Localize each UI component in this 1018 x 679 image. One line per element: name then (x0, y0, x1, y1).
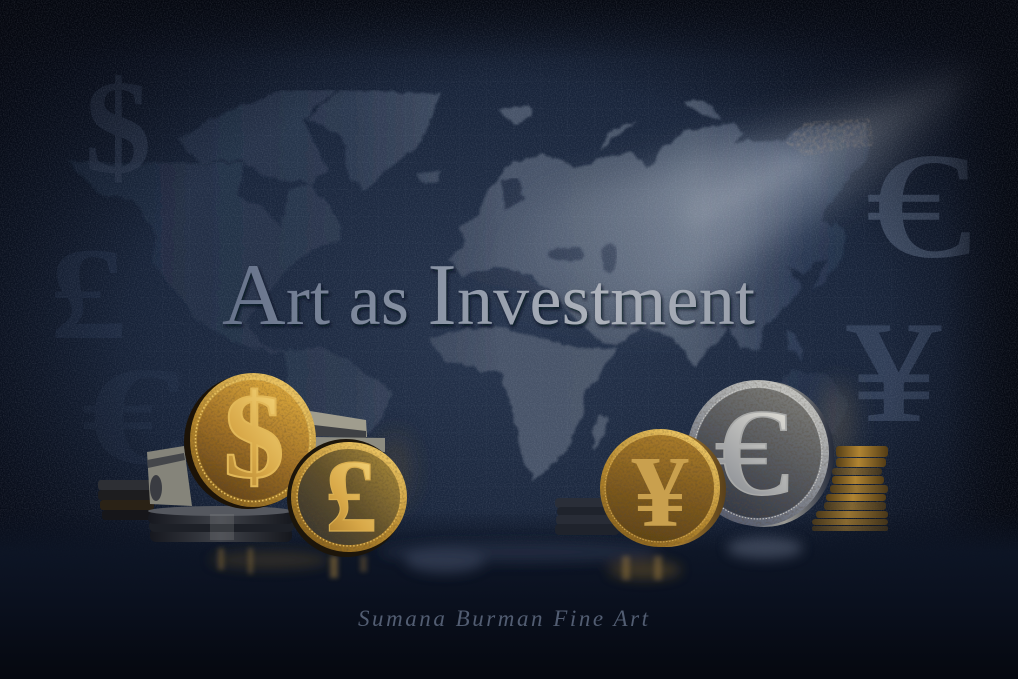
warm coin halos (379, 382, 854, 506)
rust patch on map (785, 118, 874, 156)
banknotes right (310, 411, 385, 452)
coin: euro (687, 380, 834, 527)
symbol: faint pound left: £ (49, 221, 127, 367)
sea: caspian (601, 243, 617, 273)
coin: pound: £ (325, 439, 377, 554)
sea: mediterranean (462, 268, 570, 310)
map: svalbard (498, 104, 534, 125)
floor (0, 510, 1018, 679)
footer credit: Sumana Burman Fine Art (358, 606, 649, 631)
map: indonesia (786, 328, 804, 360)
symbol: faint yen right: ¥ (848, 292, 941, 451)
banknotes left (147, 446, 192, 506)
map: novaya zemlya (600, 122, 637, 150)
map: africa (428, 327, 615, 480)
map: japan (812, 222, 846, 292)
world map (67, 90, 870, 498)
coin: dollar (184, 369, 316, 509)
light beam (470, 60, 994, 320)
inland seas (462, 178, 617, 310)
sea: baltic (502, 178, 524, 210)
map: north america (67, 162, 343, 356)
sea: black sea (550, 247, 584, 261)
title: Art as Investment (222, 247, 755, 344)
symbol: faint dollar: $ (84, 53, 152, 201)
coin: yen: ¥ (631, 437, 689, 549)
map: arctic islands (177, 90, 337, 183)
grid (140, 60, 900, 530)
coin: yen (600, 429, 726, 549)
map: eurasia (450, 123, 870, 367)
faint currency symbols (49, 53, 972, 494)
left coin group (98, 369, 407, 557)
stack: dark coins (555, 498, 619, 535)
stack: dark coins far left (98, 480, 154, 520)
map: severnaya islands (685, 100, 722, 118)
right coin group (555, 380, 888, 549)
stack: gold coins (812, 446, 888, 531)
symbol: faint euro right: € (866, 122, 972, 289)
symbol: faint euro left: € (81, 339, 183, 494)
coin: pound (287, 439, 407, 557)
floor reflections (210, 537, 803, 580)
map: south america (284, 346, 392, 498)
map: iceland (416, 170, 440, 183)
coin: dollar: $ (224, 369, 284, 504)
map: australia (768, 372, 850, 434)
map: greenland (307, 90, 443, 193)
stack: silver coins (148, 506, 294, 542)
map: madagascar (592, 414, 608, 450)
coin: euro: € (714, 384, 790, 521)
